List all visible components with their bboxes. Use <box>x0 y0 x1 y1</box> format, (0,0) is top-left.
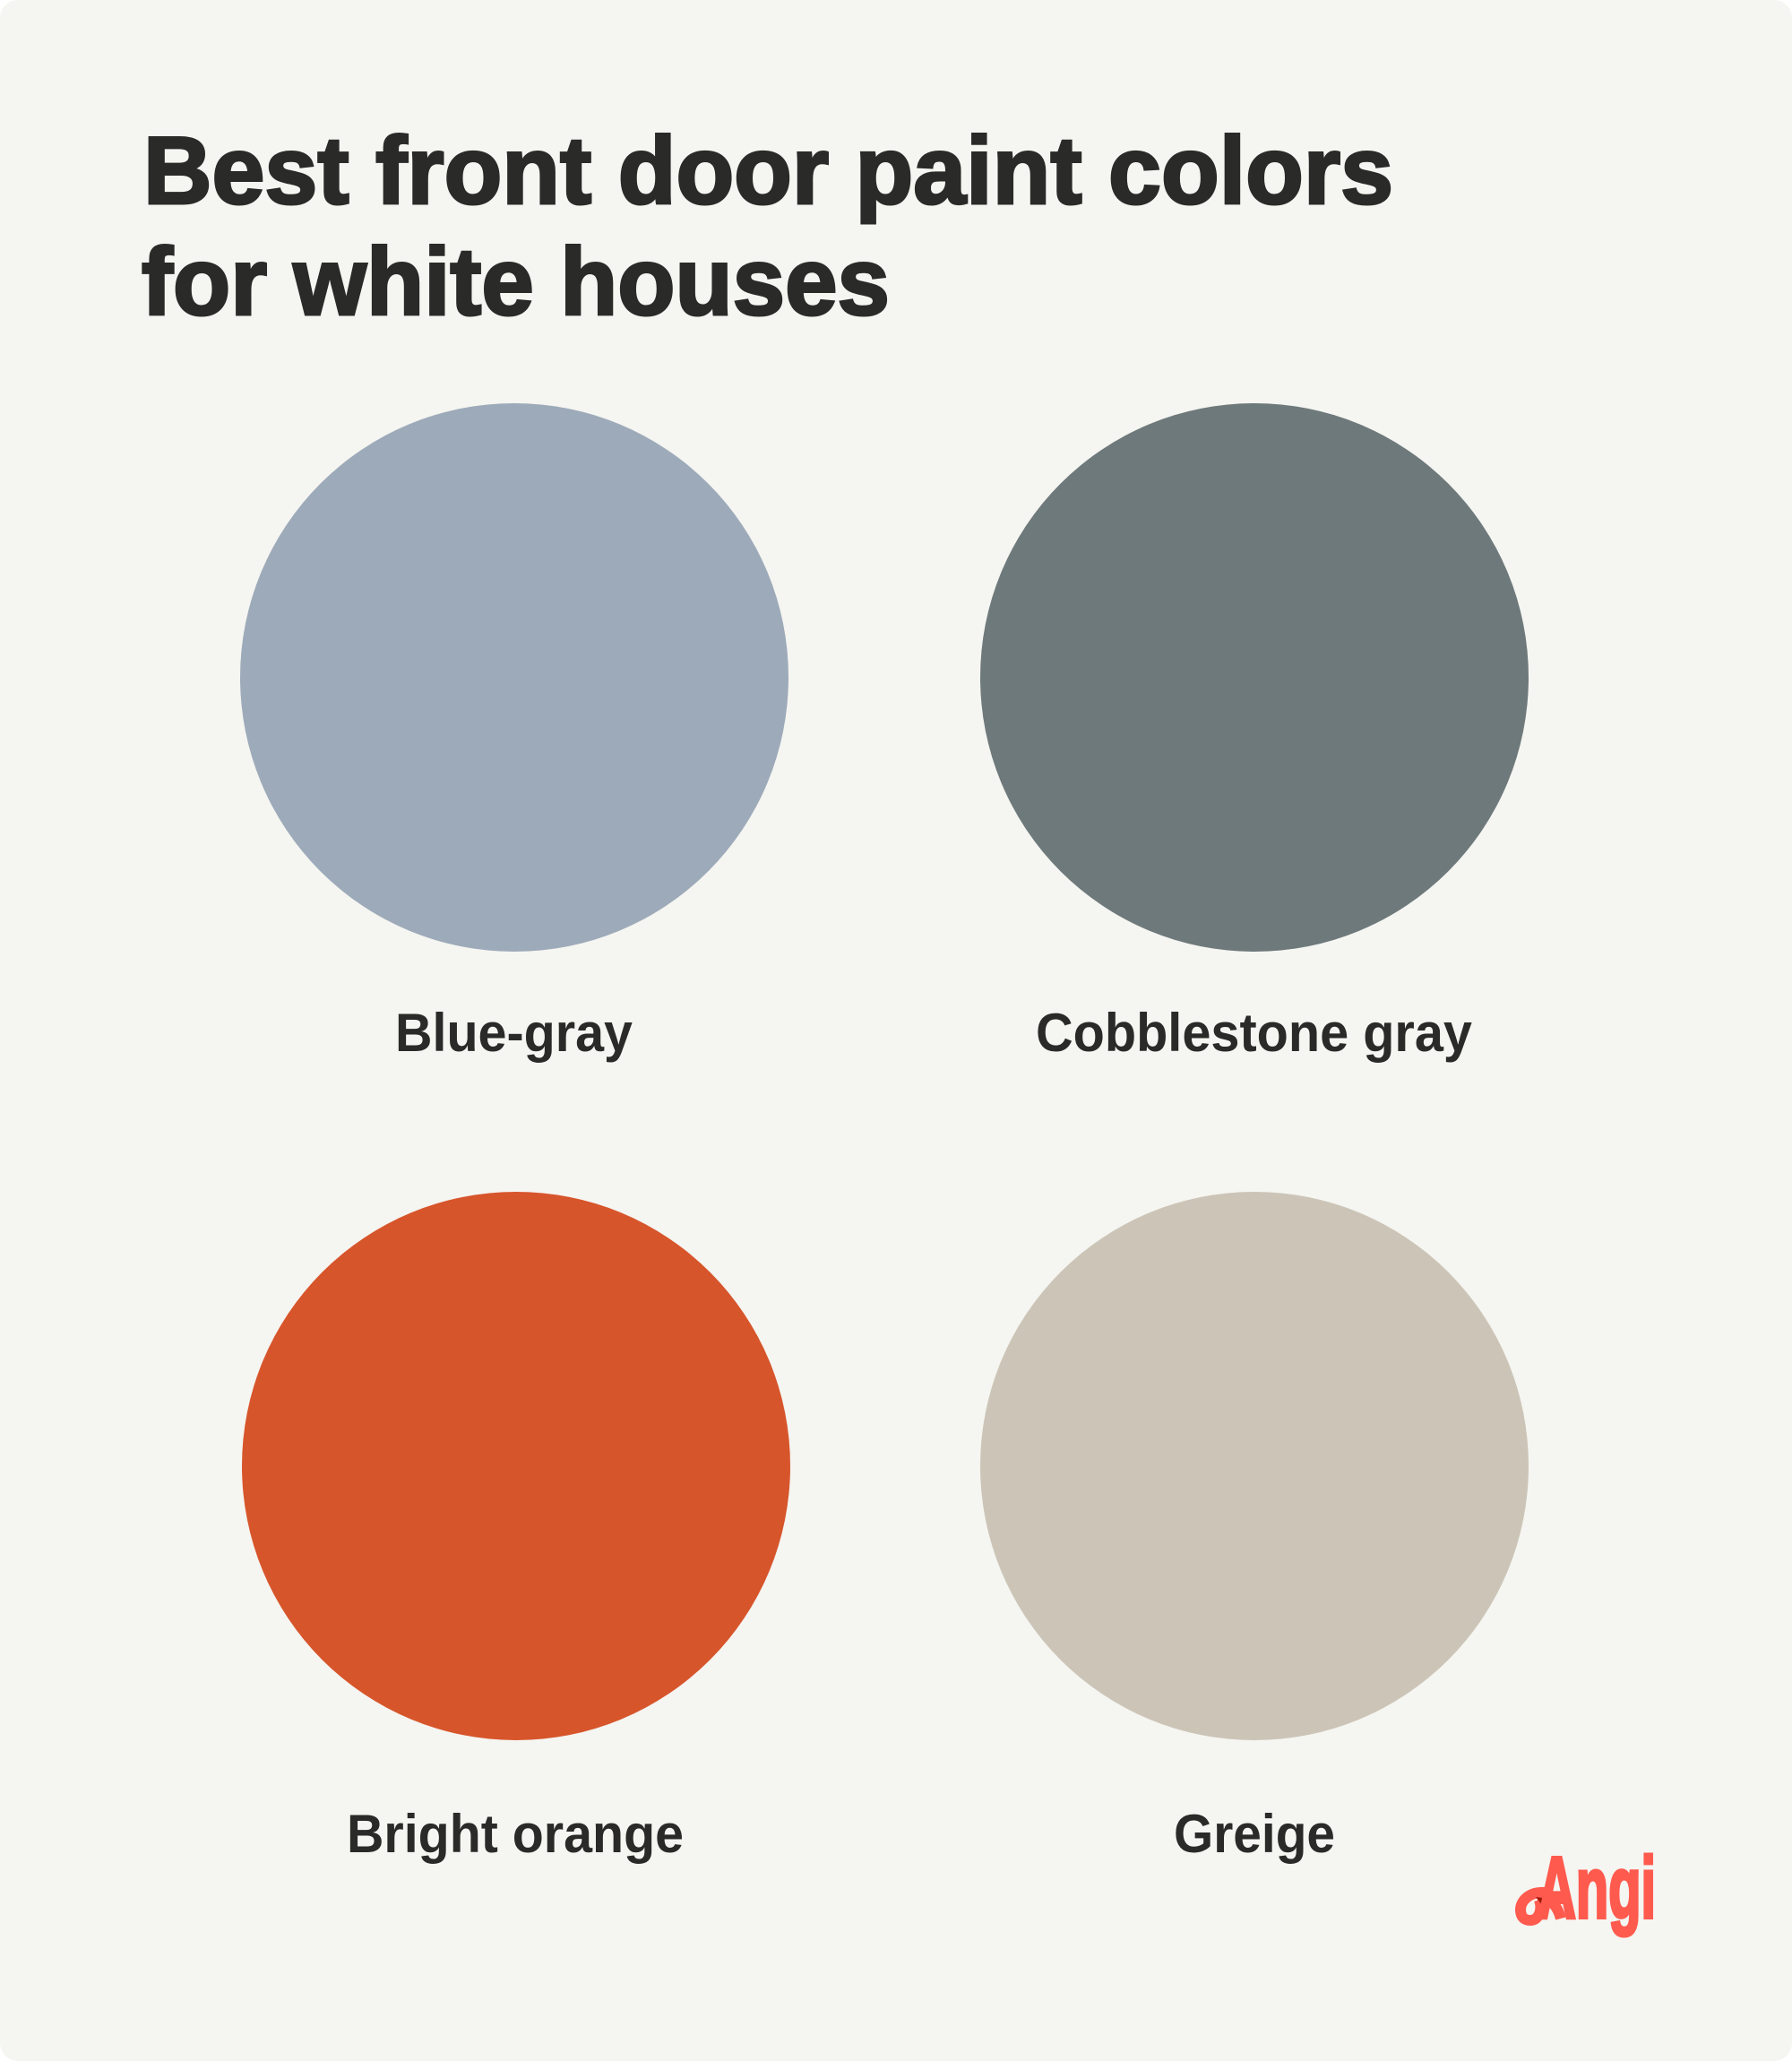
logo: Angi <box>1521 1839 1656 1936</box>
label: cobblestone gray: Cobblestone gray <box>1036 1003 1473 1063</box>
swatch: bright orange <box>242 1192 790 1864</box>
label: bright orange: Bright orange <box>347 1804 684 1864</box>
logo: Angi: Angi <box>1538 1839 1656 1936</box>
title: for white houses <box>142 228 890 335</box>
swatch: blue-gray <box>240 403 788 1063</box>
label: blue-gray: Blue-gray <box>395 1003 633 1063</box>
title: Best front door paint colors <box>143 116 1393 224</box>
title <box>142 116 1393 335</box>
swatch: cobblestone gray <box>980 403 1529 1063</box>
swatch: greige <box>980 1192 1529 1864</box>
label: greige: Greige <box>1174 1804 1335 1864</box>
